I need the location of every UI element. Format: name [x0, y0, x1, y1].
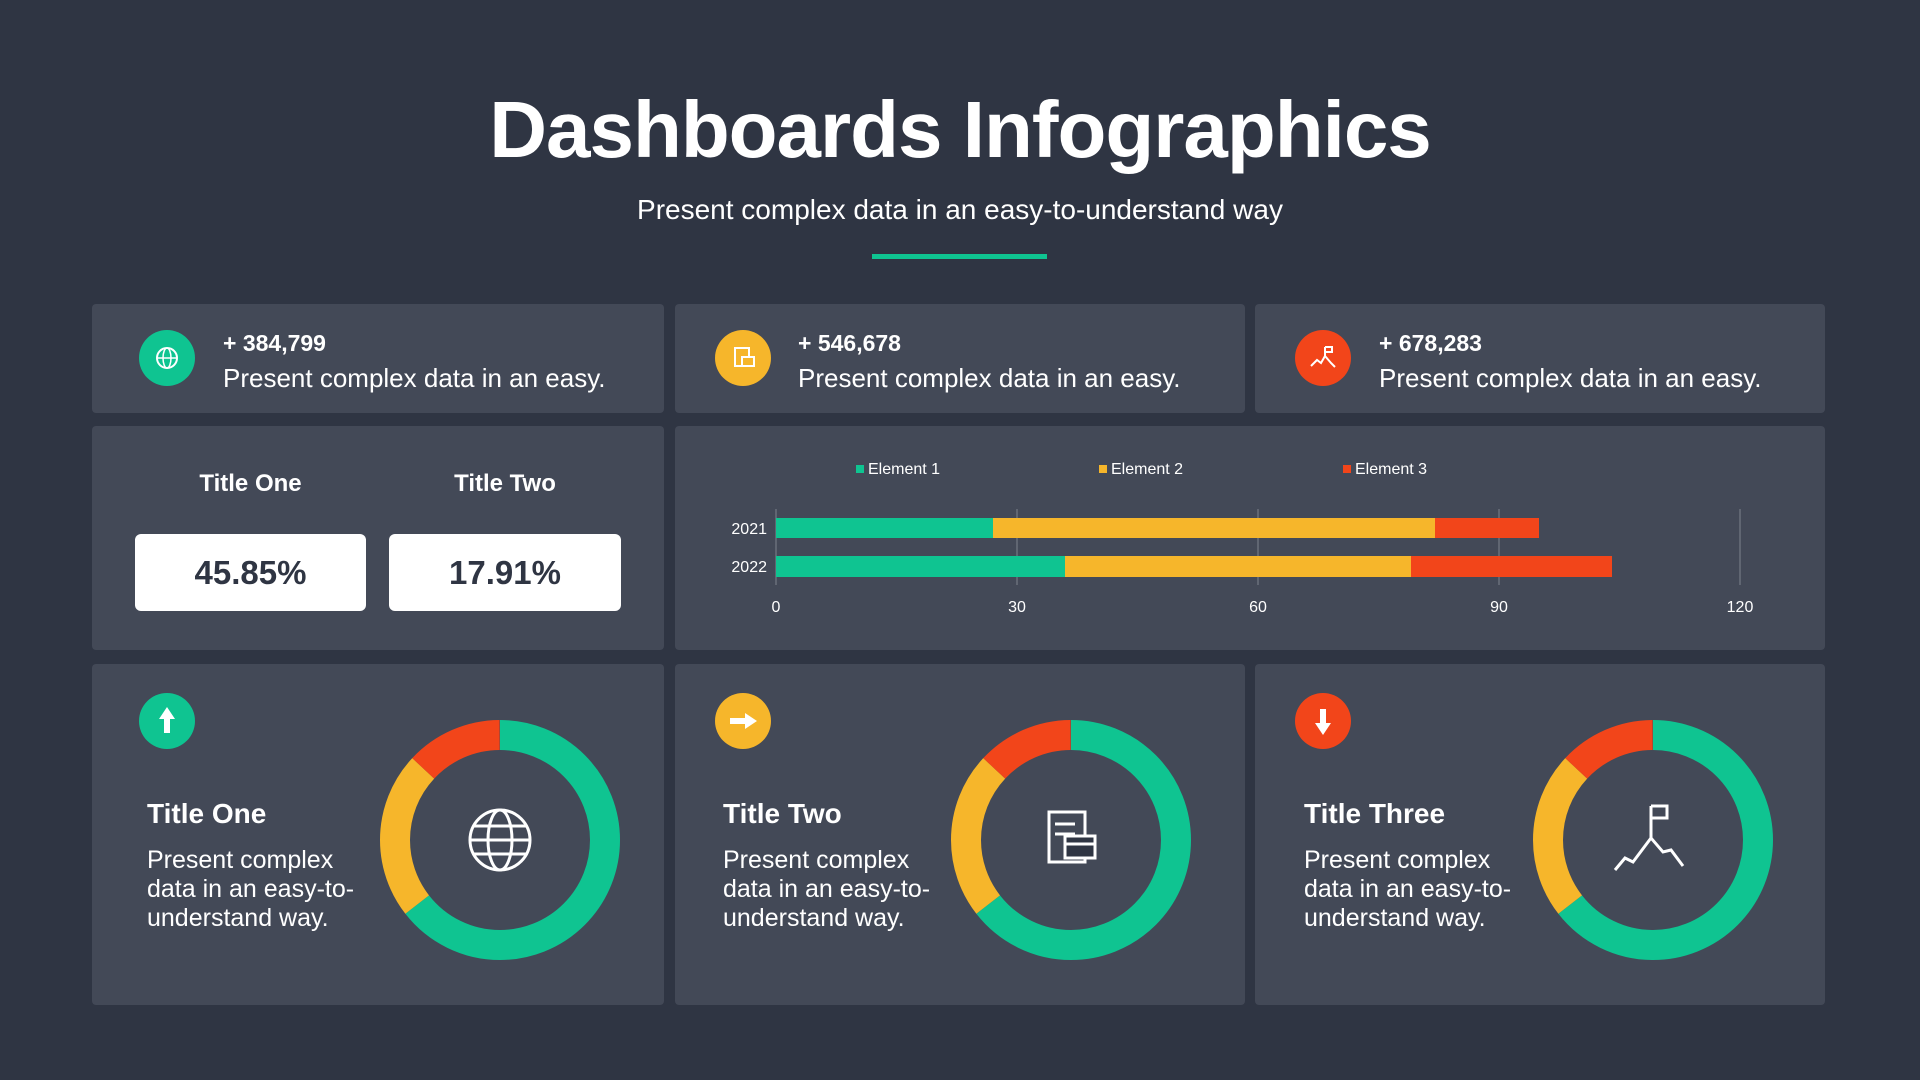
text [147, 846, 354, 932]
bar chart: 60 [1249, 599, 1267, 616]
text: understand way. [723, 904, 905, 932]
bar chart: 2021 [731, 521, 767, 538]
icon: globe [139, 330, 195, 386]
text: understand way. [147, 904, 329, 932]
donut chart [380, 720, 620, 960]
text: Present complex [1304, 846, 1490, 874]
panel: card two [675, 664, 1245, 1005]
heading: title two: Title Two [454, 470, 556, 497]
text: Present complex [147, 846, 333, 874]
panel: percentages [92, 426, 664, 650]
subtitle: Present complex data in an easy-to-understand way [637, 194, 1283, 225]
text: understand way. [1304, 904, 1486, 932]
value box 1 [135, 534, 366, 611]
panel: stat 3 [1255, 304, 1825, 413]
icon: mountain flag [1295, 330, 1351, 386]
bar chart: 0 [772, 599, 781, 616]
bar chart: Element 3 [1355, 461, 1427, 478]
text: Present complex data in an easy. [223, 363, 606, 393]
bar chart: Element 1 [868, 461, 940, 478]
accent underline [872, 254, 1047, 259]
bar chart: 90 [1490, 599, 1508, 616]
text: data in an easy-to- [147, 875, 354, 903]
bar chart: 30 [1008, 599, 1026, 616]
heading: title one: Title One [199, 470, 302, 497]
icon: down arrow [1295, 693, 1351, 749]
text [1304, 846, 1511, 932]
text: Present complex data in an easy. [1379, 363, 1762, 393]
icon: document [715, 330, 771, 386]
heading: Title Three [1304, 798, 1445, 829]
panel: stat 1 [92, 304, 664, 413]
value box 1: 45.85% [195, 554, 306, 591]
bar chart: 120 [1727, 599, 1753, 616]
panel: card one [92, 664, 664, 1005]
icon: right arrow [715, 693, 771, 749]
bar chart: 2022 [731, 559, 767, 576]
donut chart [951, 720, 1191, 960]
donut chart [1533, 720, 1773, 960]
number: + 384,799 [223, 330, 326, 356]
bar chart: Element 2 [1111, 461, 1183, 478]
text: data in an easy-to- [1304, 875, 1511, 903]
title: Dashboards Infographics [489, 85, 1431, 174]
value box 2 [389, 534, 621, 611]
text: data in an easy-to- [723, 875, 930, 903]
text [723, 846, 930, 932]
text: Present complex data in an easy. [798, 363, 1181, 393]
panel: stat 2 [675, 304, 1245, 413]
heading: Title One [147, 798, 266, 829]
heading: Title Two [723, 798, 842, 829]
icon: up arrow [139, 693, 195, 749]
value box 2: 17.91% [449, 554, 561, 591]
bar chart [731, 461, 1753, 616]
number: + 678,283 [1379, 330, 1482, 356]
panel: card three [1255, 664, 1825, 1005]
number: + 546,678 [798, 330, 901, 356]
panel: bar chart [675, 426, 1825, 650]
text: Present complex [723, 846, 909, 874]
